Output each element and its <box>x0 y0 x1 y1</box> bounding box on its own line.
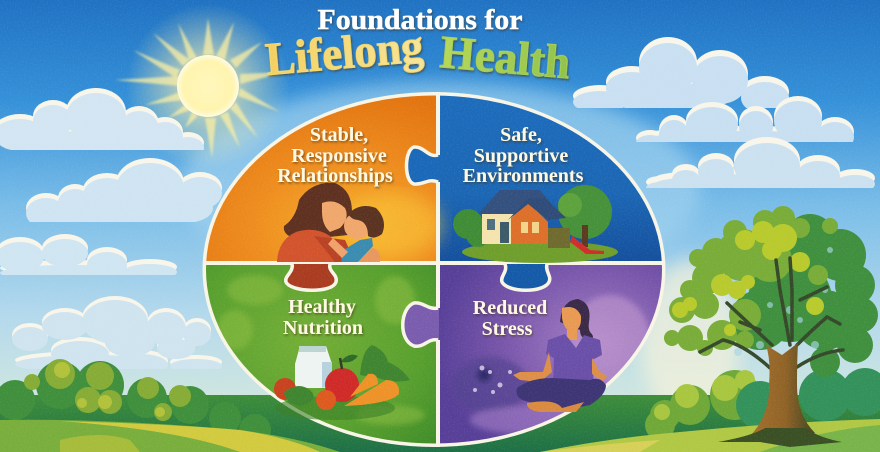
blue knob into orange <box>406 147 439 184</box>
cloud: second left <box>26 158 222 229</box>
panel: reduced stress <box>439 264 669 452</box>
text: quadrant label safe supportive environments: Environments <box>463 165 584 187</box>
purple knob into green <box>403 303 439 346</box>
text: quadrant label stable responsive relationships: Stable, <box>310 124 368 146</box>
cloud: lower left <box>12 296 222 376</box>
text: quadrant label stable responsive relationships: Responsive <box>291 145 387 167</box>
title <box>263 4 572 89</box>
puzzle pieces <box>200 90 669 452</box>
meditating woman <box>513 299 607 412</box>
text: quadrant label safe supportive environments: Supportive <box>474 145 568 167</box>
cloud: lower right <box>646 137 875 188</box>
text: quadrant label safe supportive environments: Safe, <box>500 124 542 146</box>
cloud: third left <box>0 234 177 275</box>
cloud: middle right <box>636 96 854 142</box>
purple knob outline <box>403 303 438 346</box>
orange knob into green <box>286 264 336 290</box>
healthy food illustration <box>274 345 410 420</box>
blue knob into purple <box>502 264 550 290</box>
green patches <box>217 275 425 425</box>
sun <box>115 4 290 168</box>
text: quadrant label healthy nutrition: Healthy <box>288 296 356 318</box>
oak tree <box>664 206 878 447</box>
house illustration <box>453 185 618 263</box>
title: Health <box>438 26 572 89</box>
cloud: upper right <box>573 37 789 114</box>
pale arc behind the puzzle <box>180 82 700 298</box>
yellow glow in orange panel <box>342 193 442 257</box>
cloud: upper left <box>0 88 204 150</box>
mother and child illustration <box>277 183 384 262</box>
text: quadrant label healthy nutrition: Nutrition <box>283 317 363 339</box>
puzzle oval frame <box>202 92 666 447</box>
title: Lifelong <box>263 20 426 86</box>
panel: safe supportive environments <box>439 90 669 262</box>
purple mottled stress cloud <box>452 295 650 434</box>
title: Foundations for <box>318 4 523 36</box>
pale haze right of the puzzle <box>640 260 740 420</box>
text: quadrant label reduced stress: Stress <box>482 318 533 340</box>
text: quadrant label reduced stress: Reduced <box>473 297 547 319</box>
text: quadrant label stable responsive relationships: Relationships <box>277 165 393 187</box>
pale speckles in stress cloud <box>473 366 512 394</box>
panel: stable responsive relationships <box>200 90 437 262</box>
panel: healthy nutrition <box>200 264 437 452</box>
blue knob outline <box>406 147 438 184</box>
background trees and hills <box>0 359 880 452</box>
puzzle dividers <box>203 92 665 447</box>
